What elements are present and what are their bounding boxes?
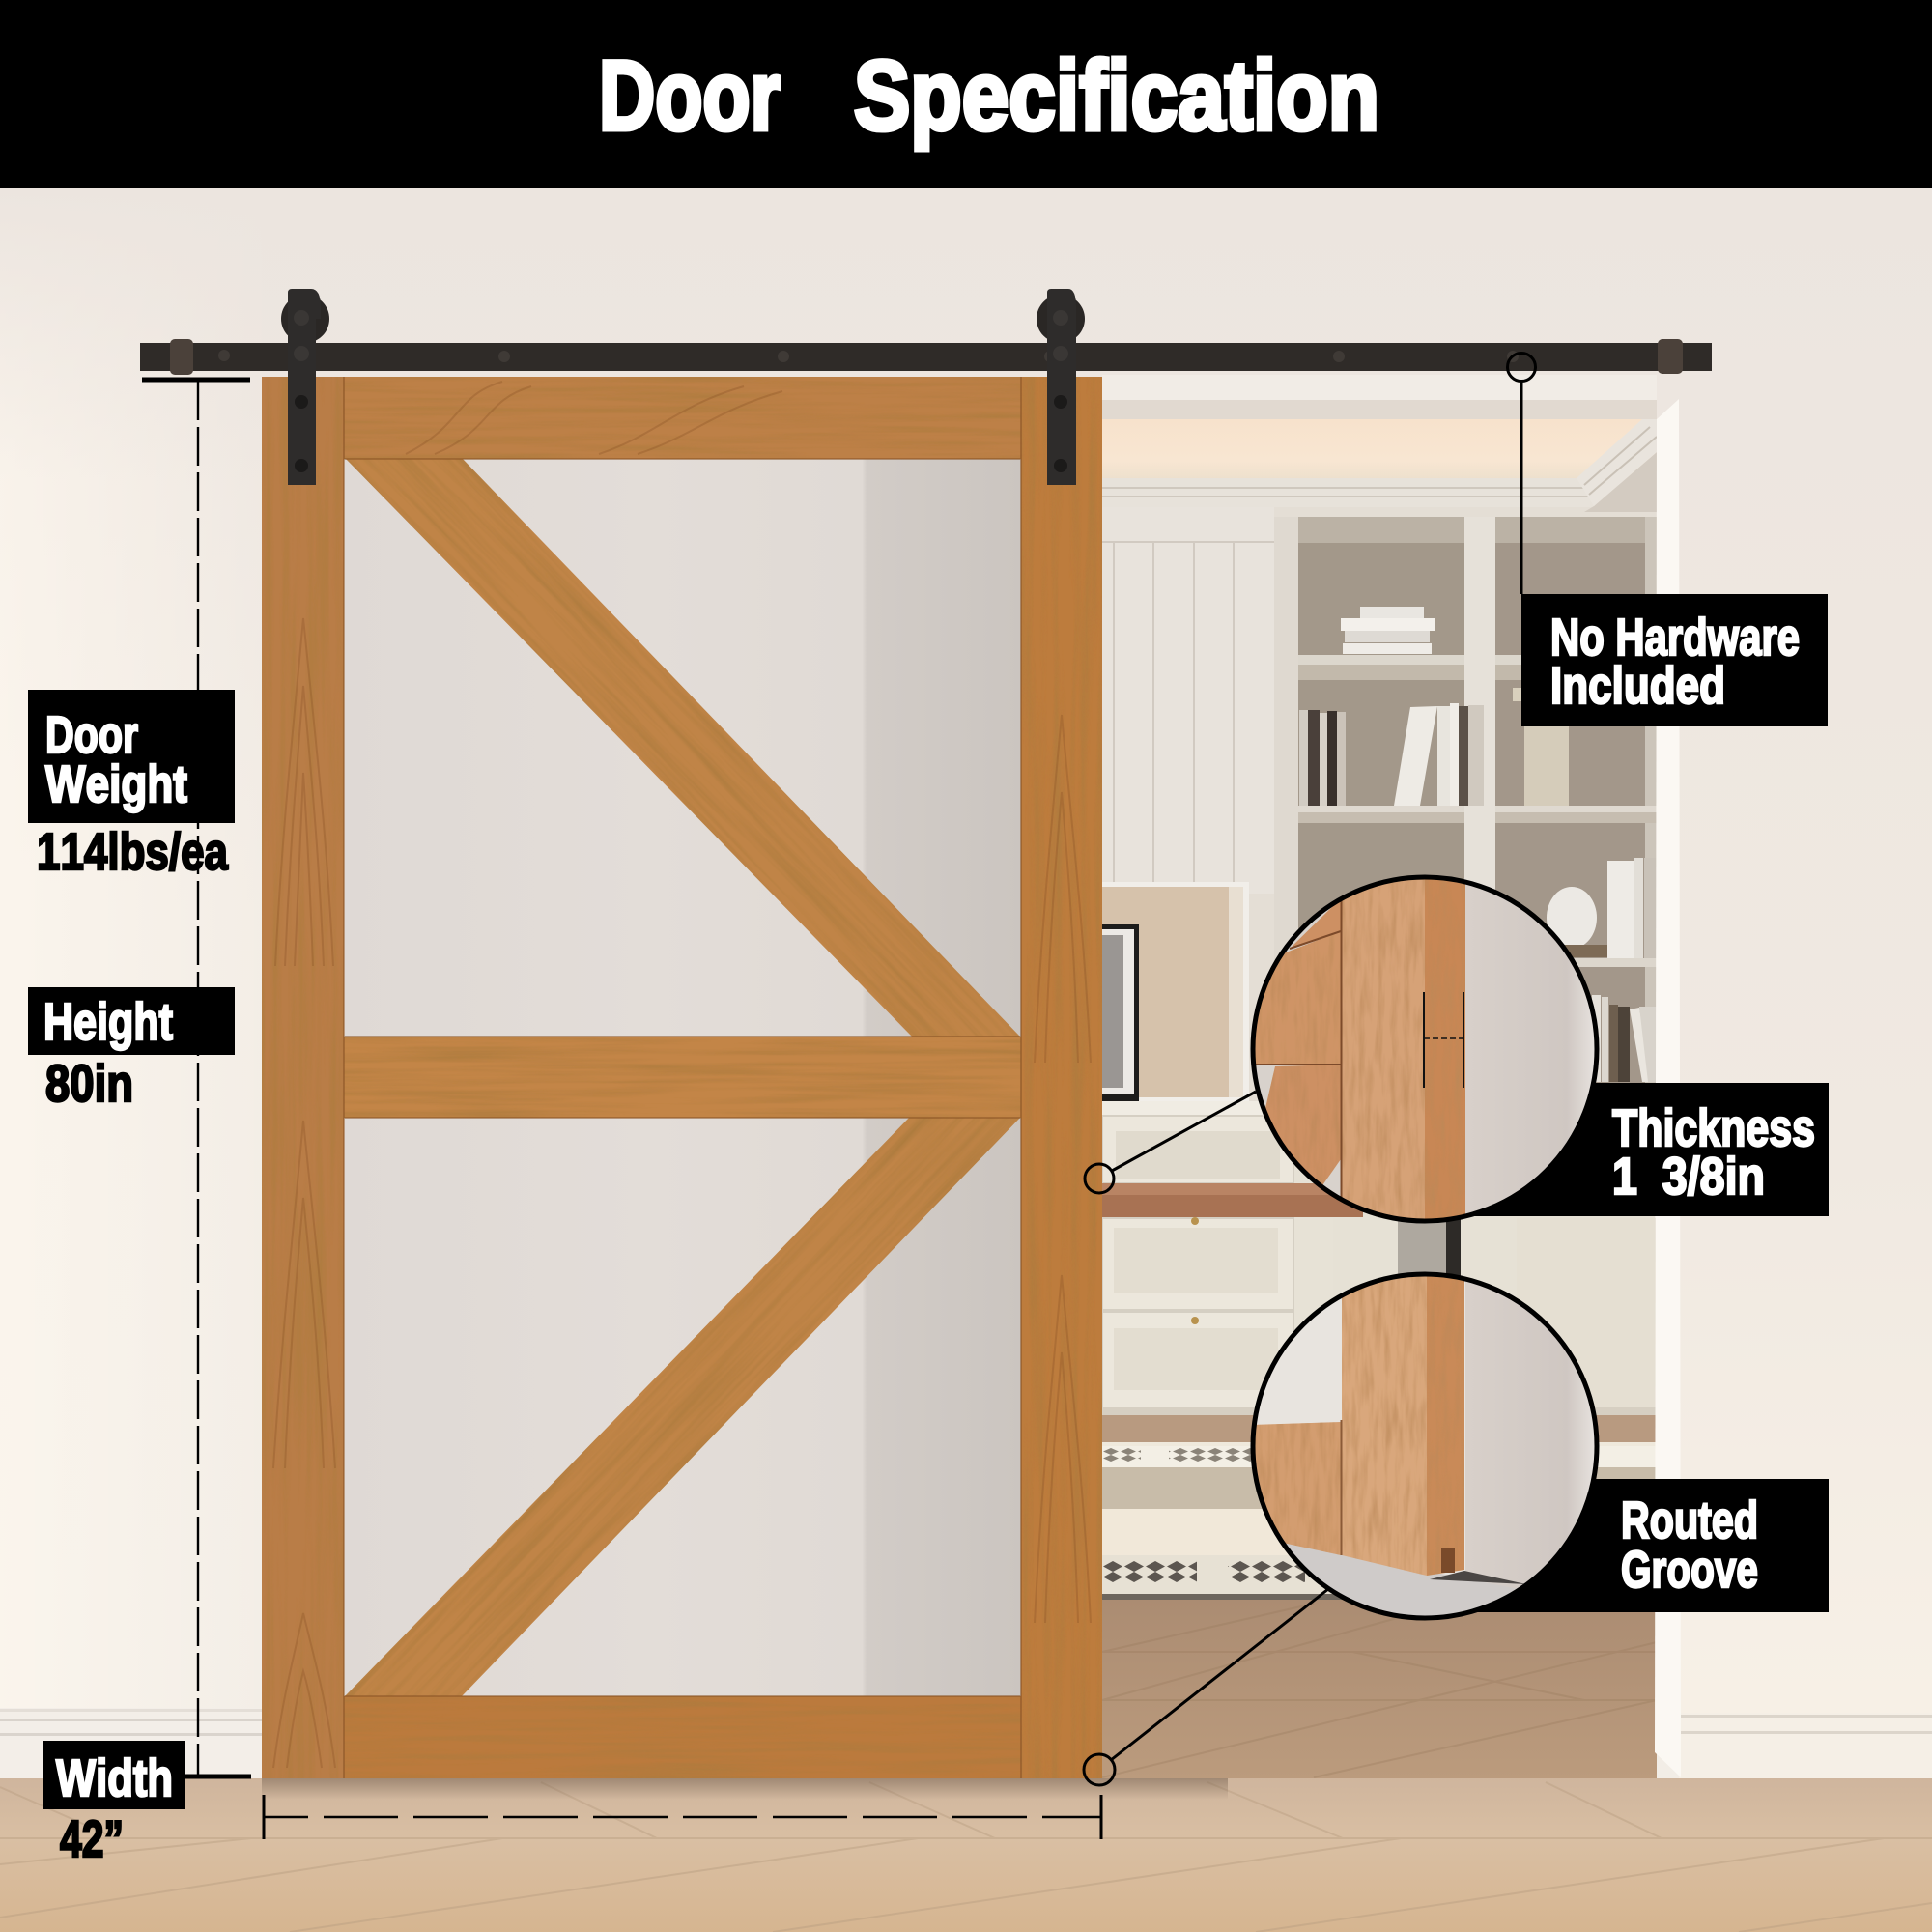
- back wall and crown moulding: [1102, 419, 1657, 1135]
- track bolts: [218, 350, 1519, 362]
- detail circle: routed groove: [1251, 1272, 1604, 1623]
- door frame jamb: [1655, 399, 1681, 1777]
- right stile: [1021, 377, 1102, 1778]
- stile front face: [1342, 1272, 1427, 1576]
- title: Specification: [854, 41, 1379, 151]
- callout: width: 42”: [60, 1810, 124, 1868]
- bottom rail: [344, 1696, 1021, 1778]
- callout: door weight: [28, 690, 235, 881]
- callout: width: Width: [56, 1749, 173, 1807]
- callout: no hardware included: Included: [1550, 657, 1725, 715]
- callout: height: [28, 987, 235, 1113]
- left hanger: [281, 289, 329, 485]
- right hanger: [1037, 289, 1085, 485]
- middle rail: [344, 1037, 1021, 1118]
- callout: routed groove: Groove: [1621, 1541, 1758, 1599]
- stile edge: [1425, 869, 1465, 1227]
- width dimension line: [263, 1795, 1103, 1839]
- callout: no hardware included: [1507, 354, 1828, 726]
- floor: [1287, 1544, 1476, 1615]
- top rail: [344, 377, 1021, 459]
- upper wood block: [1251, 931, 1341, 1065]
- thickness measure mark: [1424, 992, 1463, 1088]
- upper diagonal brace: [346, 459, 1020, 1037]
- left stile: [262, 377, 344, 1778]
- bookshelf: [1274, 517, 1657, 1116]
- callout: door weight: Weight: [45, 755, 187, 813]
- pointer: thickness: [1085, 1092, 1256, 1193]
- pointer: groove: [1084, 1589, 1328, 1785]
- header bar: [0, 0, 1932, 188]
- lower wood wedge: [1265, 1065, 1341, 1184]
- books and ornaments: [1299, 607, 1657, 1082]
- track stops: [170, 339, 1683, 375]
- stile front face: [1342, 869, 1425, 1227]
- height dimension line: [142, 377, 251, 1779]
- callout: routed groove: [1468, 1479, 1829, 1612]
- callout: width: [43, 1741, 185, 1868]
- baseboards: [0, 1708, 1932, 1779]
- callout: height: 80in: [45, 1055, 133, 1113]
- lower rail: [1251, 1422, 1341, 1555]
- lower diagonal brace: [345, 1118, 1020, 1696]
- wainscot panels: [1102, 507, 1274, 894]
- wall art: [1102, 882, 1249, 1101]
- cabinets, drawers and countertop: [1102, 1101, 1657, 1415]
- callout: routed groove: Routed: [1621, 1492, 1758, 1549]
- title: Door: [599, 41, 781, 151]
- callout: door weight: Door: [45, 706, 138, 764]
- groove: [1441, 1548, 1455, 1573]
- callout: thickness: [1468, 1083, 1829, 1216]
- sliding track: [140, 339, 1712, 375]
- door frame soffit: [1102, 375, 1657, 479]
- room through the opening: [1102, 375, 1657, 1778]
- callout: thickness: 1 3/8in: [1612, 1148, 1765, 1206]
- callout: thickness: Thickness: [1612, 1099, 1815, 1157]
- patterned rug: [1102, 1442, 1657, 1600]
- back floor: [1102, 1415, 1657, 1778]
- glass panel backdrop: [345, 458, 1021, 1696]
- stile edge: [1427, 1272, 1464, 1576]
- callout: height: Height: [43, 993, 173, 1051]
- title: [599, 41, 1379, 151]
- callout: no hardware included: No Hardware: [1550, 609, 1800, 667]
- detail circle: thickness: [1251, 869, 1601, 1227]
- door: [262, 377, 1102, 1778]
- front floor: [0, 1778, 1932, 1932]
- callout: door weight: 114lbs/ea: [37, 823, 229, 881]
